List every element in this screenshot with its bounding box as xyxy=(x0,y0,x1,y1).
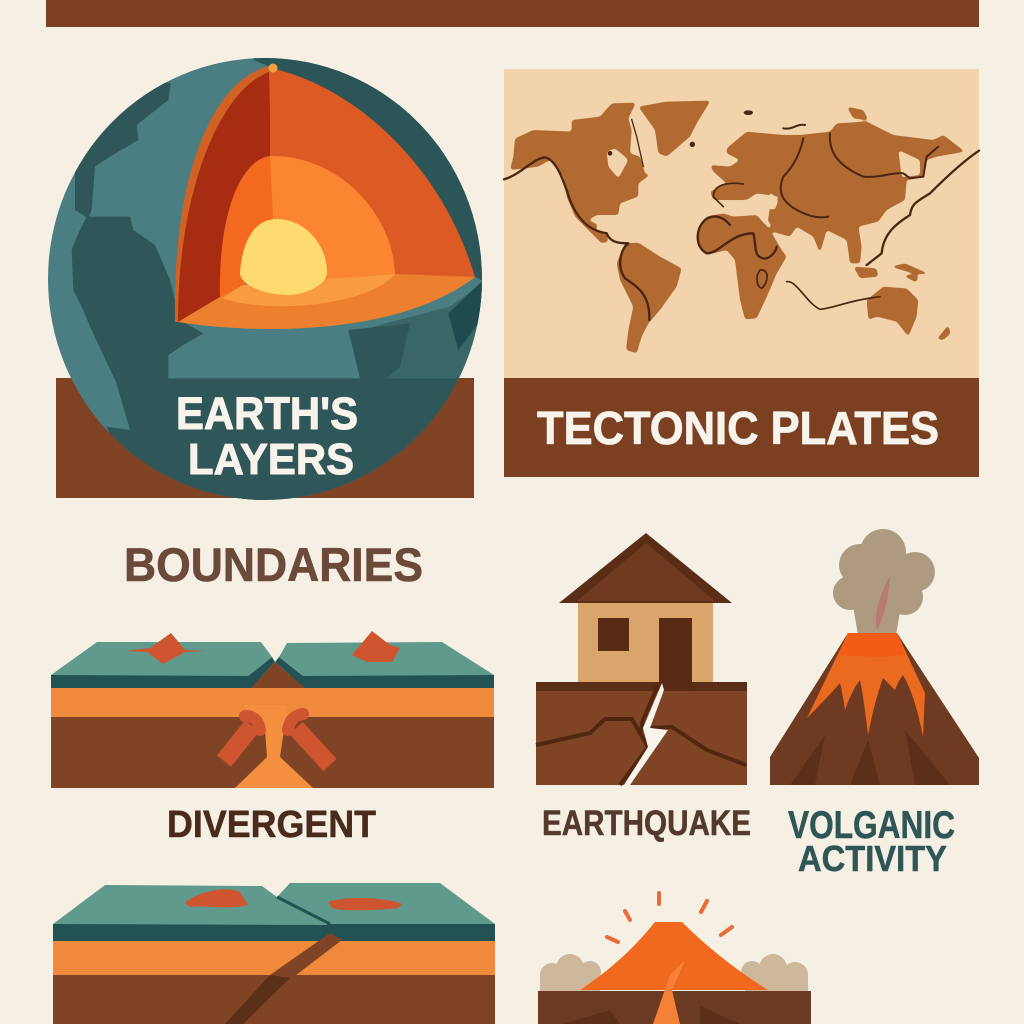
walls xyxy=(578,603,713,683)
base xyxy=(538,991,811,1024)
roof xyxy=(559,533,732,603)
icon: erupting volcano xyxy=(770,529,979,785)
diagram: convergent boundary xyxy=(53,883,495,1024)
heading: tectonic plates: TECTONIC PLATES xyxy=(537,402,939,454)
surface lava patches xyxy=(185,889,402,910)
label: volcanic activity xyxy=(788,804,955,879)
cone xyxy=(580,922,768,990)
label banner xyxy=(56,378,474,498)
panel: earth's layers xyxy=(40,50,490,510)
core cutaway xyxy=(175,64,475,329)
plate boundary lines xyxy=(504,119,979,320)
heading: earth's layers: LAYERS xyxy=(188,435,354,484)
magma arrows xyxy=(224,714,330,765)
heading: earth's layers xyxy=(176,388,358,484)
label: earthquake: EARTHQUAKE xyxy=(542,804,751,843)
icon: earthquake house xyxy=(536,533,747,785)
panel: tectonic plates xyxy=(504,69,979,477)
ash clouds xyxy=(540,954,808,991)
sparks xyxy=(607,893,732,942)
cone xyxy=(770,633,979,785)
bays and seas xyxy=(607,148,920,228)
globe xyxy=(40,50,490,510)
label: volcanic activity: VOLGANIC xyxy=(788,804,955,847)
heading: earth's layers: EARTH'S xyxy=(176,388,358,439)
label: volcanic activity: ACTIVITY xyxy=(798,838,947,879)
cracked ground xyxy=(536,682,747,785)
diagram: divergent boundary xyxy=(51,631,494,788)
world map xyxy=(504,101,979,353)
ash cloud xyxy=(833,529,935,635)
icon: hot spot volcano xyxy=(538,893,811,1024)
label banner xyxy=(504,378,979,477)
top banner xyxy=(46,0,979,27)
lava stream xyxy=(653,960,685,1024)
lava xyxy=(807,633,925,737)
surface volcanoes xyxy=(125,631,400,664)
map background xyxy=(504,69,979,379)
label: divergent: DIVERGENT xyxy=(167,804,376,846)
heading: boundaries: BOUNDARIES xyxy=(124,538,423,591)
